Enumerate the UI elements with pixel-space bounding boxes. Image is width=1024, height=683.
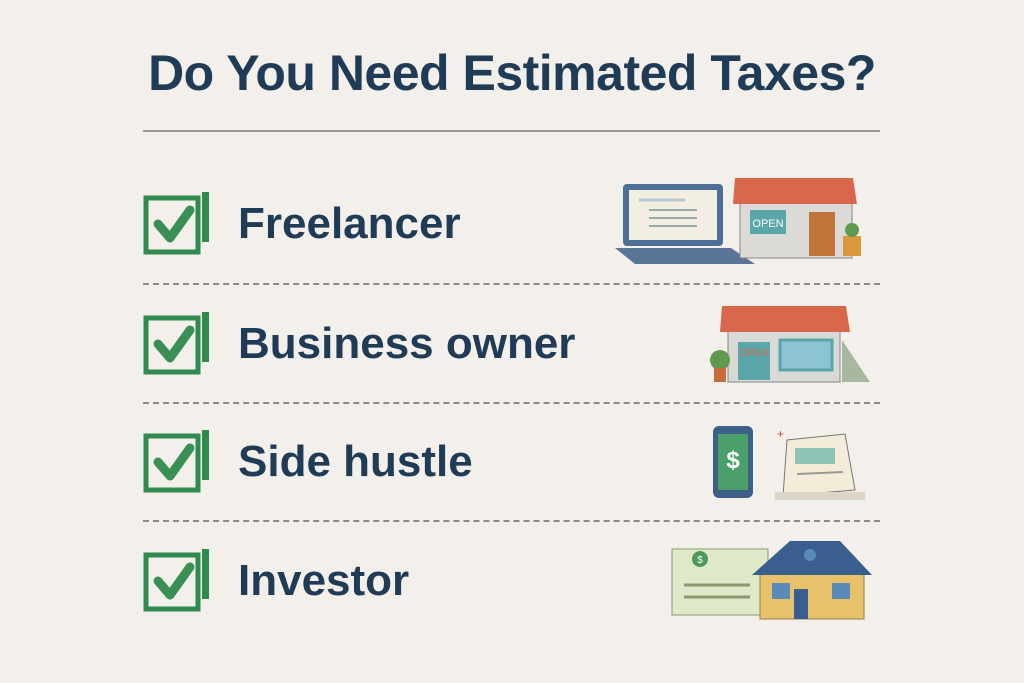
illustration: storefront — [710, 306, 870, 382]
title: Do You Need Estimated Taxes? — [148, 45, 876, 101]
label: Side hustle — [238, 437, 473, 486]
label: Business owner — [238, 319, 575, 368]
row: freelancer — [144, 192, 461, 254]
illustration: documents and house — [672, 541, 872, 620]
icon: checkbox — [144, 192, 209, 254]
icon: checkbox — [144, 430, 209, 492]
label: Freelancer — [238, 199, 461, 248]
icon: checkbox — [144, 549, 209, 612]
illustration: laptop and shop — [615, 178, 861, 264]
icon: checkbox — [144, 312, 209, 374]
illustration: laptop and shop: OPEN — [752, 218, 784, 230]
row: business owner — [144, 312, 575, 374]
row: investor — [144, 549, 409, 612]
illustration: phone and receipt — [713, 426, 865, 500]
row: side hustle — [144, 430, 473, 492]
illustration: phone and receipt: + — [777, 427, 784, 441]
illustration: phone and receipt: $ — [726, 447, 740, 474]
illustration: storefront: OPEN — [740, 348, 768, 359]
illustration: documents and house: $ — [697, 555, 703, 566]
label: Investor — [238, 556, 409, 605]
